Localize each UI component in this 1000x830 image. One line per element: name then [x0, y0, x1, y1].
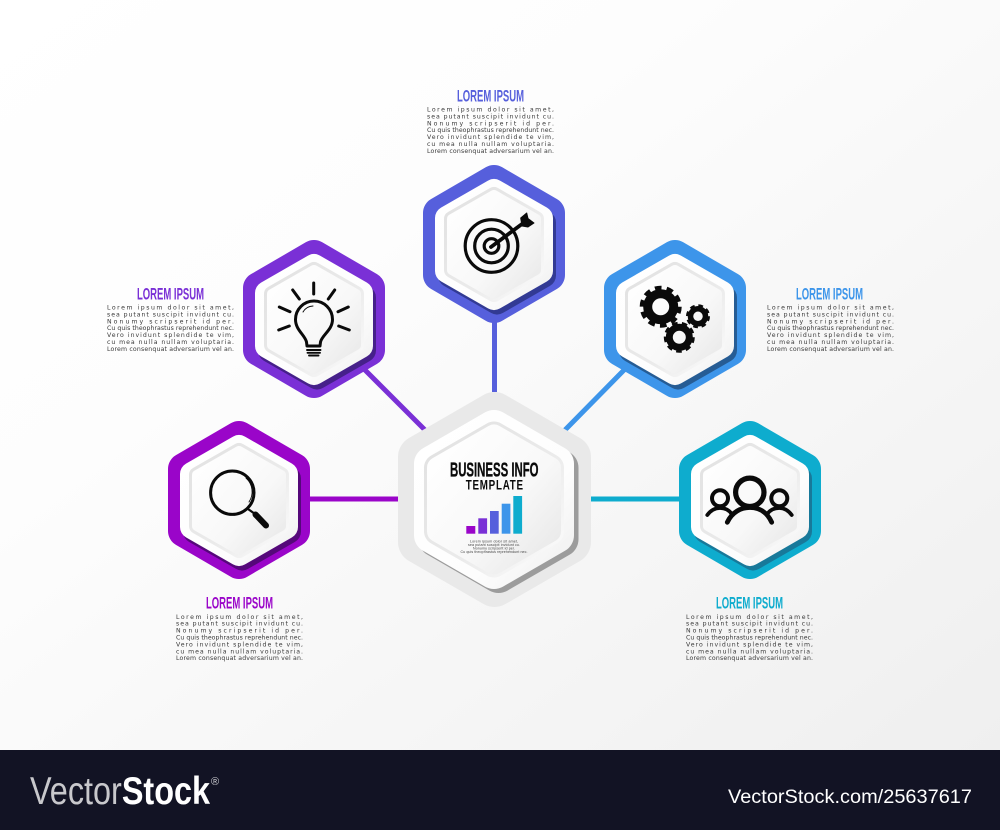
footer logo: VectorStock	[30, 770, 210, 813]
panel: central hexagon	[420, 414, 569, 585]
left text block: cu mea nulla nullam voluptaria.	[176, 648, 303, 655]
icon: light bulb	[279, 283, 349, 356]
top text block: cu mea nulla nullam voluptaria.	[427, 141, 554, 148]
icon: people	[707, 478, 792, 522]
top text block: Lorem consenquat adversarium vel an.	[427, 148, 554, 155]
upper right text block: cu mea nulla nullam voluptaria.	[767, 339, 894, 346]
panel: upper right gears	[620, 256, 730, 382]
icon: target	[465, 213, 534, 272]
central small text: Lorem ipsum dolor sit amet,	[470, 539, 518, 543]
upper right text block: Lorem consenquat adversarium vel an.	[767, 346, 894, 353]
top text block: Lorem ipsum dolor sit amet,	[427, 106, 554, 114]
panel: upper left bulb	[259, 256, 369, 382]
panel: right people	[695, 437, 805, 563]
top text block: sea putant suscipit invidunt cu.	[427, 113, 554, 120]
right text block: Lorem consenquat adversarium vel an.	[686, 655, 813, 662]
central title: BUSINESS INFO	[450, 460, 538, 482]
connector: upper right	[565, 367, 627, 430]
upper left heading: LOREM IPSUM	[137, 284, 204, 303]
left text block: Cu quis theophrastus reprehendunt nec.	[176, 634, 303, 642]
upper right heading: LOREM IPSUM	[796, 284, 863, 303]
upper left text block: Lorem ipsum dolor sit amet,	[107, 304, 234, 312]
upper left text block: sea putant suscipit invidunt cu.	[107, 311, 234, 318]
right text block	[686, 614, 813, 662]
panel: left magnifier	[184, 437, 294, 563]
upper right text block	[767, 304, 894, 353]
upper left text block: Nonumy scripserit id per.	[107, 318, 234, 325]
connector: right	[591, 496, 684, 502]
top text block: Cu quis theophrastus reprehendunt nec.	[427, 127, 554, 134]
upper left text block: cu mea nulla nullam voluptaria.	[107, 339, 234, 346]
icon: magnifier	[211, 471, 266, 526]
panel: top target	[439, 181, 549, 307]
upper right text block: Nonumy scripserit id per.	[767, 318, 894, 325]
icon: gears	[642, 288, 708, 351]
left text block: Vero invidunt splendide te vim,	[176, 641, 303, 648]
upper left text block: Cu quis theophrastus reprehendunt nec.	[107, 325, 234, 332]
upper left text block	[107, 304, 234, 353]
top text block: Nonumy scripserit id per.	[427, 120, 554, 127]
left text block: Lorem consenquat adversarium vel an.	[176, 655, 303, 662]
connector: left	[305, 496, 398, 502]
upper right text block: Cu quis theophrastus reprehendunt nec.	[767, 325, 894, 332]
connector: top	[492, 320, 497, 392]
top text block	[427, 106, 554, 155]
right text block: sea putant suscipit invidunt cu.	[686, 621, 813, 628]
central subtitle: TEMPLATE	[466, 477, 523, 493]
upper right text block: Lorem ipsum dolor sit amet,	[767, 304, 894, 312]
central small text: sea putant suscipit invidunt cu.	[468, 543, 520, 547]
right text block: Nonumy scripserit id per.	[686, 628, 813, 635]
connector: upper left	[362, 367, 425, 430]
top heading: LOREM IPSUM	[457, 87, 524, 106]
footer registered mark: ®	[211, 776, 219, 788]
right text block: Vero invidunt splendide te vim,	[686, 641, 813, 648]
top text block: Vero invidunt splendide te vim,	[427, 134, 554, 141]
left heading: LOREM IPSUM	[206, 593, 273, 612]
upper right text block: sea putant suscipit invidunt cu.	[767, 311, 894, 318]
footer bar	[0, 750, 1000, 830]
left text block: Lorem ipsum dolor sit amet,	[176, 614, 303, 621]
footer image id: VectorStock.com/25637617	[728, 786, 972, 808]
right text block: Lorem ipsum dolor sit amet,	[686, 614, 813, 621]
left text block	[176, 614, 303, 662]
left text block: Nonumy scripserit id per.	[176, 628, 303, 635]
central small text	[460, 539, 528, 554]
right text block: Cu quis theophrastus reprehendunt nec.	[686, 634, 813, 642]
upper right text block: Vero invidunt splendide te vim,	[767, 332, 894, 339]
left text block: sea putant suscipit invidunt cu.	[176, 621, 303, 628]
bar chart	[466, 496, 522, 534]
central small text: Nonumy scripserit id per.	[473, 547, 515, 551]
right text block: cu mea nulla nullam voluptaria.	[686, 648, 813, 655]
central small text: Cu quis theophrastus reprehendunt nec.	[460, 550, 528, 554]
upper left text block: Lorem consenquat adversarium vel an.	[107, 346, 234, 353]
upper left text block: Vero invidunt splendide te vim,	[107, 332, 234, 339]
right heading: LOREM IPSUM	[716, 593, 783, 612]
